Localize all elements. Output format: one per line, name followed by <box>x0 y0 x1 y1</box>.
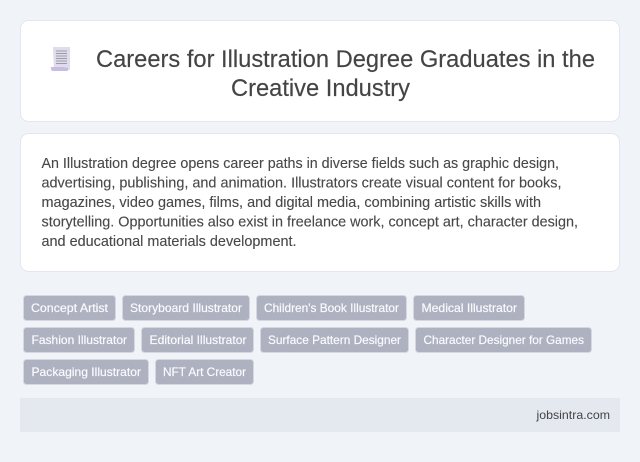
title: Creative Industry <box>231 75 410 102</box>
tag: Storyboard Illustrator <box>122 296 250 320</box>
text block: description: storytelling. Opportunities also exist in freelance work, concept art, character design, <box>42 214 578 230</box>
tag: Character Designer for Games <box>416 328 592 352</box>
tag: Medical Illustrator <box>414 296 524 320</box>
tag: Fashion Illustrator: Fashion Illustrator <box>32 333 127 347</box>
text block: description: and educational materials development. <box>42 234 296 250</box>
tag: NFT Art Creator: NFT Art Creator <box>163 365 246 379</box>
text block: description: An Illustration degree opens career paths in diverse fields such as graphic design, <box>42 156 559 172</box>
tag: Editorial Illustrator <box>142 328 254 352</box>
tag: Surface Pattern Designer: Surface Pattern Designer <box>268 333 401 347</box>
icon: document scroll <box>51 47 70 71</box>
tag: Medical Illustrator: Medical Illustrator <box>422 301 517 315</box>
tag: Character Designer for Games: Character Designer for Games <box>424 333 584 347</box>
tag: Surface Pattern Designer <box>260 328 408 352</box>
title: Careers for Illustration Degree Graduates in the <box>96 46 595 73</box>
tag: Concept Artist: Concept Artist <box>31 301 109 315</box>
title <box>96 46 595 102</box>
footer text: source: jobsintra.com <box>535 408 610 422</box>
text block: description: magazines, video games, films, and digital media, combining artistic skills with <box>42 195 541 211</box>
tag: NFT Art Creator <box>156 360 254 384</box>
tag: Editorial Illustrator: Editorial Illustrator <box>150 333 246 347</box>
panel: header <box>20 20 620 122</box>
footer bar <box>20 398 620 432</box>
text block: description <box>42 156 578 250</box>
tag list <box>24 296 592 384</box>
tag: Concept Artist <box>24 296 116 320</box>
tag: Children's Book Illustrator: Children's Book Illustrator <box>264 301 399 315</box>
tag: Storyboard Illustrator: Storyboard Illustrator <box>130 301 242 315</box>
tag: Children's Book Illustrator <box>256 296 406 320</box>
tag: Packaging Illustrator <box>24 360 148 384</box>
panel: description <box>20 134 620 272</box>
text block: description: advertising, publishing, and animation. Illustrators create visual content for books, <box>42 176 562 192</box>
tag: Packaging Illustrator: Packaging Illustrator <box>32 365 141 379</box>
tag: Fashion Illustrator <box>24 328 134 352</box>
